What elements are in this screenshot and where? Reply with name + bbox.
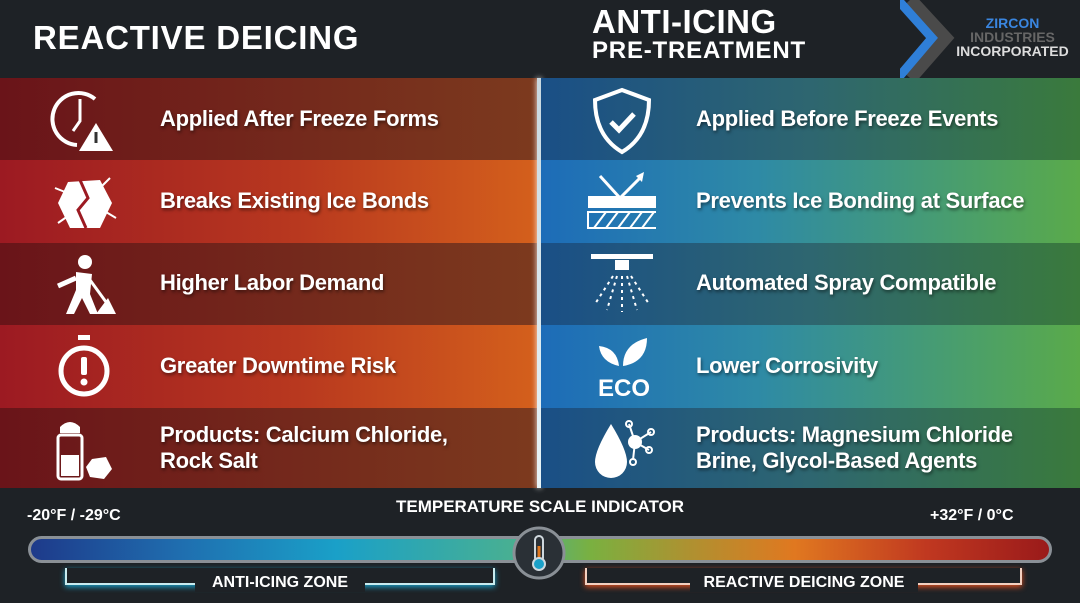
- icon: eco leaf: [598, 338, 650, 402]
- logo: [900, 0, 1069, 78]
- text: lower corrosivity: Lower Corrosivity: [696, 353, 878, 378]
- icon: thermometer: [512, 526, 566, 580]
- temperature scale: ANTI-ICING ZONE: [212, 574, 348, 591]
- text: higher labor demand: Higher Labor Demand: [160, 270, 384, 295]
- text: applied before freeze events: Applied Before Freeze Events: [696, 106, 998, 131]
- icon: salt shaker: [56, 422, 112, 480]
- title: anti-icing pre-treatment: [592, 3, 806, 64]
- text: breaks existing ice bonds: Breaks Existing Ice Bonds: [160, 188, 429, 213]
- text: automated spray compatible: Automated Spray Compatible: [696, 270, 996, 295]
- icon: drop molecule: [595, 420, 655, 478]
- text: greater downtime risk: Greater Downtime Risk: [160, 353, 396, 378]
- temperature scale: REACTIVE DEICING ZONE: [704, 574, 904, 591]
- label: warm end: +32°F / 0°C: [930, 507, 1014, 524]
- label: cold end: -20°F / -29°C: [27, 507, 121, 524]
- temperature scale: [27, 497, 1052, 592]
- text: products magnesium chloride: [696, 422, 1014, 476]
- icon: worker shoveling: [57, 255, 116, 314]
- icon: eco leaf: ECO: [598, 375, 650, 402]
- panel: reactive deicing: [0, 78, 537, 488]
- bracket: anti-icing zone: [65, 568, 495, 585]
- divider glow: [537, 78, 541, 488]
- text: prevents ice bonding: Prevents Ice Bonding at Surface: [696, 188, 1024, 213]
- gradient bar: [28, 536, 1052, 563]
- icon: clock warning: [50, 91, 113, 151]
- logo: INCORPORATED: [956, 43, 1069, 59]
- text: products magnesium chloride: Products: Magnesium Chloride: [696, 422, 1013, 447]
- bracket: reactive deicing zone: [585, 568, 1022, 585]
- logo: ZIRCON: [986, 15, 1039, 31]
- title: anti-icing pre-treatment: PRE-TREATMENT: [592, 37, 806, 64]
- icon: shield check: [593, 88, 651, 154]
- text: products calcium chloride: Products: Calcium Chloride,: [160, 422, 448, 447]
- title: anti-icing pre-treatment: ANTI-ICING: [592, 3, 777, 40]
- text: products calcium chloride: [160, 422, 449, 473]
- icon: stopwatch alert: [58, 335, 110, 396]
- icon: surface barrier: [587, 172, 656, 229]
- text: products magnesium chloride: Brine, Glycol-Based Agents: [696, 448, 977, 473]
- title: reactive deicing: REACTIVE DEICING: [33, 19, 359, 56]
- logo: INDUSTRIES: [970, 29, 1055, 45]
- text: applied after freeze forms: Applied After Freeze Forms: [160, 106, 439, 131]
- heading: temperature scale indicator: TEMPERATURE SCALE INDICATOR: [396, 497, 684, 516]
- text: products calcium chloride: Rock Salt: [160, 448, 258, 473]
- icon: cracked ice: [54, 177, 116, 228]
- icon: spray nozzle: [591, 254, 653, 312]
- panel: anti-icing: [541, 78, 1080, 488]
